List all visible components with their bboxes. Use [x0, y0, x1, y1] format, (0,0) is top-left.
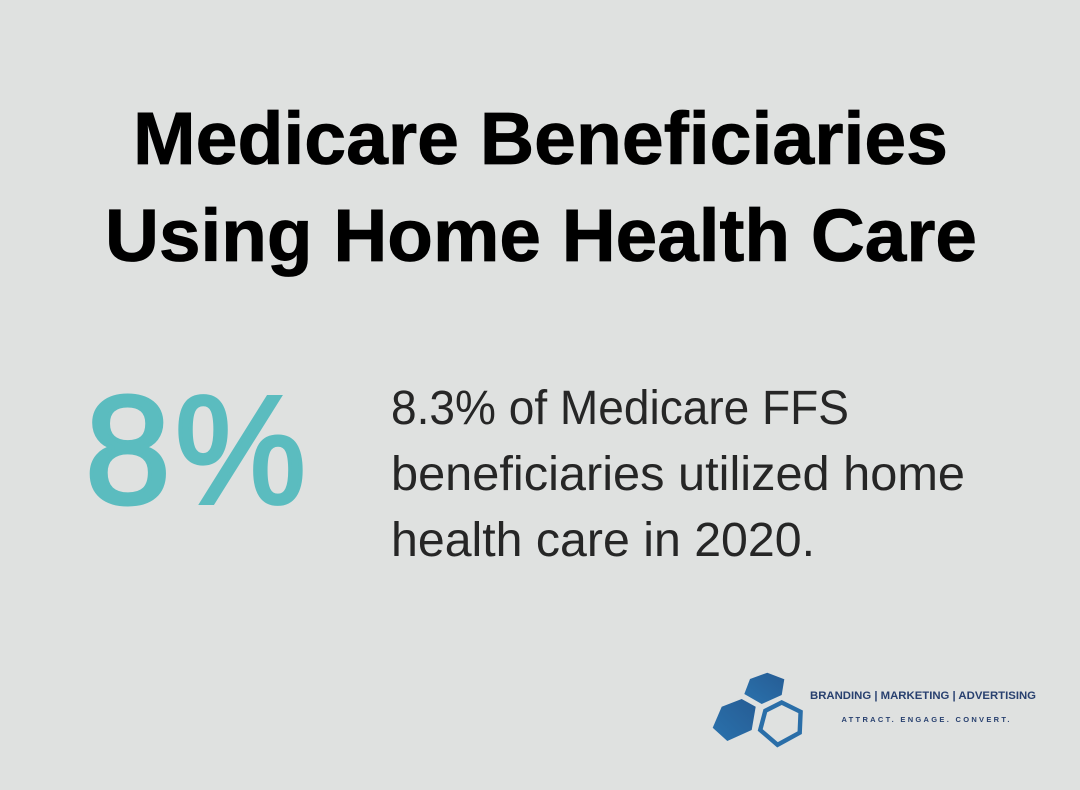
- statistic: 8%: 8: [85, 364, 171, 536]
- statistic: 8%: %: [175, 364, 306, 536]
- description text: health care in 2020.: [391, 514, 815, 567]
- icon: hexagons: [713, 673, 801, 745]
- title: Medicare Beneficiaries: [133, 97, 948, 180]
- logo: [713, 673, 1036, 745]
- statistic: 8%: [85, 364, 306, 536]
- logo tagline: attract engage convert: ATTRACT. ENGAGE. CONVERT.: [842, 715, 1010, 724]
- logo tagline: services: BRANDING | MARKETING | ADVERTISING: [810, 690, 1036, 702]
- title: [105, 97, 977, 277]
- description text: [391, 382, 965, 567]
- title: Using Home Health Care: [105, 194, 977, 277]
- description text: beneficiaries utilized home: [391, 448, 965, 501]
- description text: 8.3% of Medicare FFS: [391, 382, 849, 435]
